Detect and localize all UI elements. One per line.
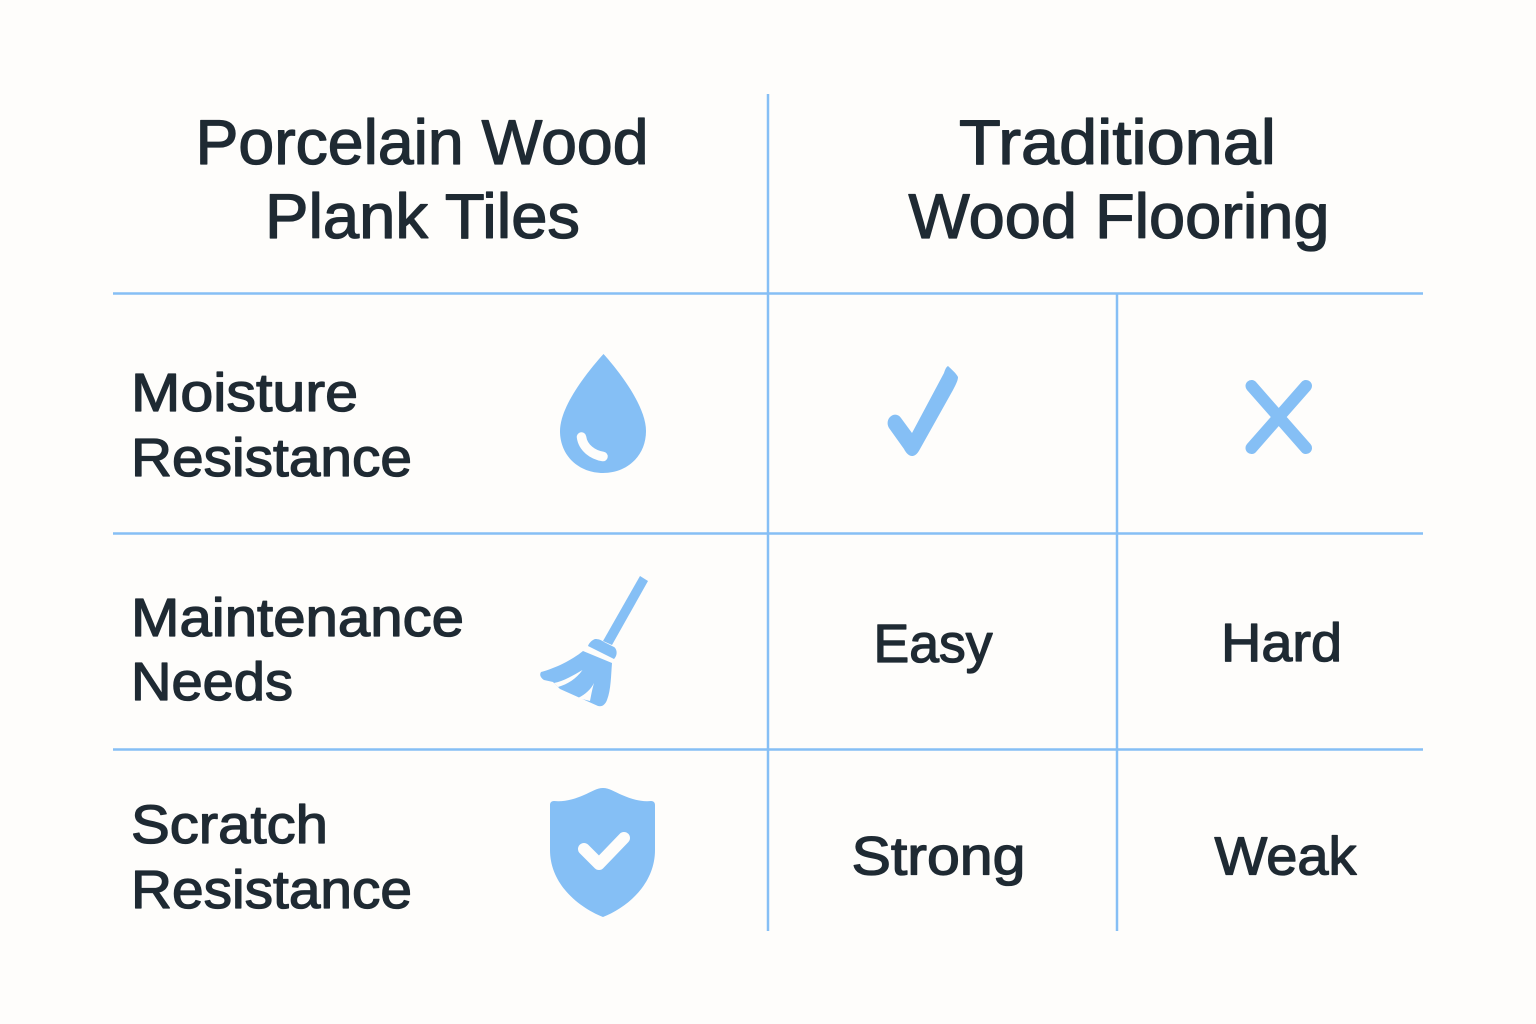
row label: Moisture Resistance: Moisture (131, 363, 358, 423)
icon: water drop (560, 354, 646, 473)
icon: cross mark (1252, 386, 1306, 448)
row label: Moisture Resistance (131, 363, 412, 488)
heading: Porcelain Wood Plank Tiles (196, 108, 648, 252)
row label: Maintenance Needs (131, 588, 464, 712)
icon: check mark (888, 366, 958, 456)
row label: Scratch Resistance: Scratch (131, 795, 328, 855)
row label: Moisture Resistance: Resistance (131, 428, 412, 488)
value: Easy: Easy (874, 614, 992, 674)
heading: Porcelain Wood Plank Tiles: Plank Tiles (265, 182, 580, 252)
value: Strong: Strong (852, 826, 1026, 886)
row label: Scratch Resistance (131, 795, 412, 920)
icon: broom (540, 576, 648, 706)
heading: Traditional Wood Flooring (908, 108, 1330, 252)
row label: Maintenance Needs: Maintenance (131, 588, 464, 648)
row label: Scratch Resistance: Resistance (131, 860, 412, 920)
heading: Traditional Wood Flooring: Wood Flooring (908, 182, 1330, 252)
value: Hard: Hard (1221, 613, 1342, 673)
icon: shield with check (550, 788, 655, 917)
value: Weak: Weak (1214, 826, 1358, 886)
row label: Maintenance Needs: Needs (131, 652, 293, 712)
heading: Porcelain Wood Plank Tiles: Porcelain Wood (196, 108, 648, 178)
heading: Traditional Wood Flooring: Traditional (959, 108, 1276, 178)
